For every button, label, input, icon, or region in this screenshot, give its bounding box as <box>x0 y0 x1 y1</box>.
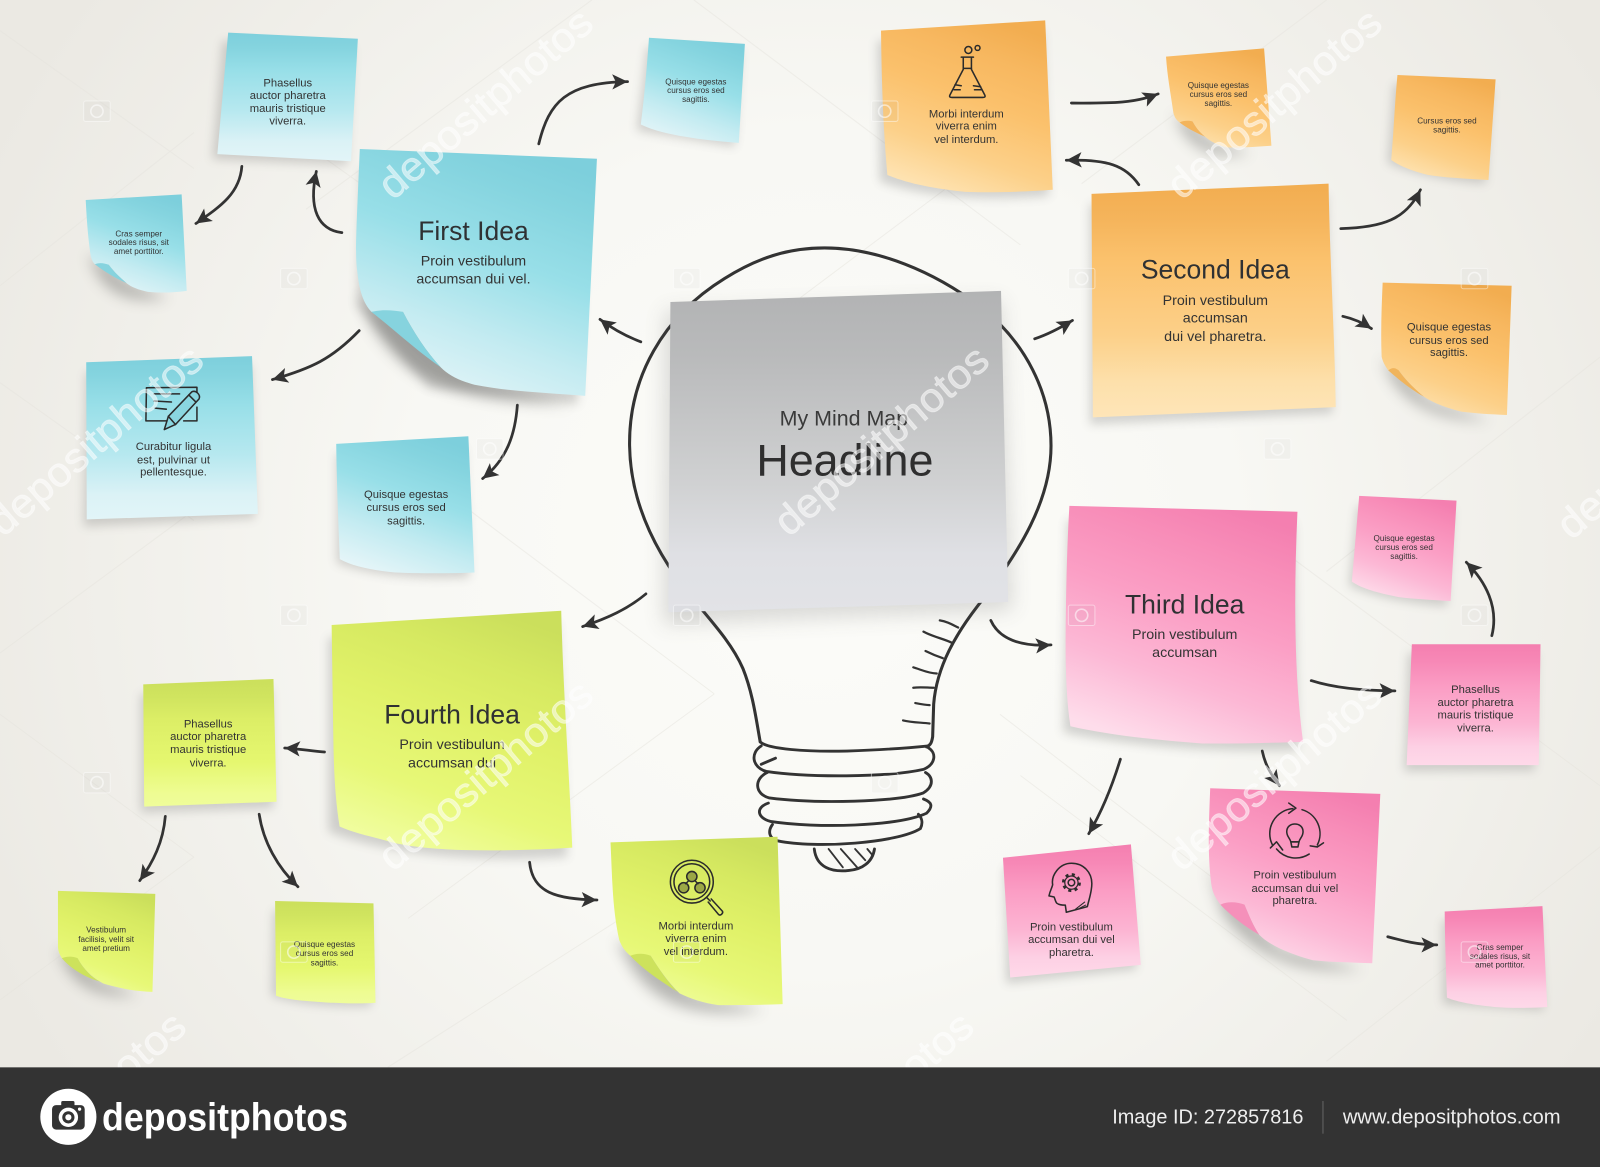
panel: blue note quisque <box>336 436 474 578</box>
second idea heading: Second Idea <box>1141 255 1290 285</box>
third idea text: Proin vestibulum <box>1132 627 1237 643</box>
central subtitle: My Mind Map <box>780 407 908 431</box>
text: Cras semper <box>1477 943 1524 952</box>
depositphotos text watermarks: depositphotos <box>369 0 602 208</box>
arrow: phasellus yellow to quisque yellow <box>259 814 298 887</box>
text: viverra enim <box>936 121 997 133</box>
arrow: phasellus yellow to vestibulum <box>140 816 165 881</box>
text: sodales risus, sit <box>109 238 170 247</box>
text: mauris tristique <box>170 744 246 756</box>
text: amet pretium <box>82 944 130 953</box>
text: cursus eros sed <box>1190 90 1248 99</box>
folded corner <box>1220 902 1259 935</box>
text: Phasellus <box>1451 684 1500 696</box>
depositphotos text watermarks: depositphotos <box>1158 670 1390 879</box>
sheet <box>1391 75 1496 180</box>
folded corner <box>630 954 678 992</box>
sheet <box>336 436 474 573</box>
fourth idea sheet <box>332 611 572 850</box>
arrow: third idea to bulb icon note <box>1262 751 1280 786</box>
sheet <box>1352 496 1457 601</box>
text: cursus eros sed <box>296 949 354 958</box>
arrow: morbi to quisque orange <box>1071 94 1158 103</box>
text: cursus eros sed <box>1375 543 1433 552</box>
third idea sheet <box>1066 506 1303 744</box>
text: sodales risus, sit <box>1470 952 1531 961</box>
text: sagittis. <box>1433 126 1461 135</box>
text: amet porttitor. <box>1475 960 1525 969</box>
panel: pink note cras <box>1443 906 1547 1010</box>
sheet <box>1381 283 1512 415</box>
sheet <box>641 38 745 143</box>
panel: fourth idea main note <box>329 611 572 859</box>
text: viverra enim <box>665 933 726 945</box>
depositphotos text watermarks: depositphotos <box>1158 0 1390 208</box>
text: cursus eros sed <box>1409 335 1489 347</box>
footer logo wordmark: depositphotos <box>102 1097 348 1140</box>
folded corner <box>1180 121 1205 137</box>
text: Morbi interdum <box>929 108 1004 120</box>
text: sagittis. <box>1390 552 1418 561</box>
text: mauris tristique <box>250 103 326 115</box>
panel: pink note with head icon <box>1003 844 1141 984</box>
first idea sheet <box>356 149 597 396</box>
text: Vestibulum <box>86 926 126 935</box>
central note sheet <box>668 291 1008 612</box>
text: pharetra. <box>1272 895 1317 907</box>
sheet <box>86 194 187 293</box>
sheet <box>611 837 783 1005</box>
text: vel interdum. <box>664 946 728 958</box>
depositphotos text watermarks: depositphotos <box>369 670 602 879</box>
footer url: www.depositphotos.com <box>1342 1106 1561 1128</box>
text: Curabitur ligula <box>136 441 212 453</box>
text: Cursus eros sed <box>1417 116 1477 125</box>
panel: blue small curled note <box>86 194 187 300</box>
lightbulb outline <box>630 248 1051 871</box>
panel: yellow curled note vestibulum <box>57 891 155 996</box>
text: Morbi interdum <box>659 921 733 933</box>
text: viverra. <box>190 757 227 769</box>
text: auctor pharetra <box>170 731 247 743</box>
fourth idea text: accumsan dui <box>408 755 496 771</box>
panel: orange small curled note <box>1166 48 1271 155</box>
icon: head with gear <box>1049 863 1092 912</box>
depositphotos camera watermarks <box>84 101 1488 962</box>
second idea text: Proin vestibulum <box>1163 293 1268 309</box>
text: sagittis. <box>387 515 425 527</box>
arrow: phasellus pink to quisque pink <box>1466 562 1494 636</box>
arrow: first idea to phasellus <box>314 171 342 233</box>
folded corner <box>62 957 100 982</box>
panel: pink note quisque top <box>1349 496 1457 606</box>
text: Proin vestibulum <box>1030 922 1113 934</box>
panel: yellow note quisque <box>271 901 376 1007</box>
sheet <box>58 891 155 992</box>
arrow: second idea to cursus <box>1341 190 1420 229</box>
text: Proin vestibulum <box>1253 870 1336 882</box>
footer divider <box>1322 1101 1323 1134</box>
arrow: fourth idea to phasellus yellow <box>285 748 324 752</box>
panel: orange note morbi <box>878 20 1053 198</box>
panel: third idea main note <box>1063 506 1303 751</box>
arrow: center to second idea <box>1035 320 1072 339</box>
arrow: phasellus to cras <box>196 166 242 223</box>
text: sagittis. <box>1430 347 1468 359</box>
footer logo icon <box>40 1089 96 1145</box>
text: pellentesque. <box>140 467 207 479</box>
text: Cras semper <box>115 230 162 239</box>
arrow: third idea to phasellus pink <box>1311 681 1395 691</box>
text: auctor pharetra <box>1437 697 1514 709</box>
first idea text: Proin vestibulum <box>421 253 526 269</box>
icon: magnifier with molecule <box>670 860 723 915</box>
panel: second idea main note <box>1090 184 1336 424</box>
arrow: center to third idea <box>991 620 1051 645</box>
panel: yellow note phasellus <box>141 679 277 812</box>
sheet <box>275 901 376 1003</box>
footer bar <box>0 1067 1600 1167</box>
text: auctor pharetra <box>250 90 327 102</box>
third idea text: accumsan <box>1152 645 1217 661</box>
panel: central headline note <box>663 291 1012 624</box>
arrow: first idea to quisque <box>483 405 517 479</box>
panel: yellow curled note with magnifier icon <box>611 837 783 1013</box>
sheet <box>1166 48 1271 148</box>
text: viverra. <box>269 115 306 127</box>
text: Quisque egestas <box>364 489 449 501</box>
text: cursus eros sed <box>667 86 725 95</box>
panel: first idea main note <box>356 149 597 404</box>
text: facilisis, velit sit <box>78 935 135 944</box>
text: Phasellus <box>263 78 312 90</box>
sheet <box>143 679 277 807</box>
panel: blue note curabitur <box>84 356 258 527</box>
icon: paper and pencil <box>146 387 199 430</box>
first idea folded corner <box>371 310 441 367</box>
bulb screw threads <box>754 742 934 871</box>
folded corner <box>95 263 127 283</box>
first idea heading: First Idea <box>418 216 529 246</box>
sheet <box>1209 788 1380 963</box>
folded corner <box>1388 368 1424 397</box>
central headline: Headline <box>756 435 933 486</box>
panel: orange note cursus <box>1388 75 1496 184</box>
bulb highlight hatching <box>903 620 958 723</box>
depositphotos text watermarks: depositphotos <box>765 336 998 545</box>
text: sagittis. <box>311 958 338 967</box>
arrow: second idea to morbi <box>1066 160 1139 185</box>
panel: blue note phasellus <box>212 33 358 165</box>
sheet <box>217 33 358 161</box>
text: sagittis. <box>1205 99 1232 108</box>
arrow: fourth idea to magnifier note <box>530 862 597 900</box>
second idea text: accumsan <box>1183 310 1248 326</box>
text: est, pulvinar ut <box>137 454 211 466</box>
arrow: first idea to curabitur <box>272 331 359 380</box>
panel: blue note top right <box>637 38 745 147</box>
text: Quisque egestas <box>1373 534 1435 543</box>
text: cursus eros sed <box>367 502 446 514</box>
panel: orange curled note quisque <box>1381 283 1512 420</box>
arrow: center to first idea <box>600 319 641 342</box>
image id: Image ID: 272857816 <box>1112 1106 1303 1128</box>
arrow: third idea to head icon note <box>1089 759 1120 834</box>
text: viverra. <box>1457 723 1494 735</box>
first idea text: accumsan dui vel. <box>416 272 531 288</box>
text: Quisque egestas <box>294 940 355 949</box>
arrow: first idea to blue top right <box>539 82 628 144</box>
second idea text: dui vel pharetra. <box>1164 329 1266 345</box>
text: mauris tristique <box>1437 709 1514 721</box>
text: Phasellus <box>184 719 233 731</box>
sheet <box>1445 906 1547 1008</box>
text: Quisque egestas <box>665 78 727 87</box>
text: sagittis. <box>682 95 710 104</box>
panel: pink note phasellus <box>1404 644 1541 771</box>
sheet <box>1003 844 1141 978</box>
second idea sheet <box>1092 184 1336 417</box>
text: Quisque egestas <box>1407 322 1491 334</box>
arrow: bulb icon note to cras pink <box>1388 937 1437 945</box>
fourth idea heading: Fourth Idea <box>384 699 520 729</box>
sheet <box>1407 644 1541 765</box>
text: amet porttitor. <box>114 247 164 256</box>
sheet <box>881 20 1053 192</box>
text: vel interdum. <box>934 134 998 146</box>
arrow: second idea to quisque curled <box>1343 316 1371 329</box>
text: Quisque egestas <box>1188 81 1249 90</box>
fourth idea text: Proin vestibulum <box>399 737 505 753</box>
text: accumsan dui vel <box>1028 934 1115 946</box>
text: accumsan dui vel <box>1252 883 1338 895</box>
panel: pink curled note with bulb icon <box>1208 788 1380 970</box>
text: pharetra. <box>1049 947 1094 959</box>
arrow: center to fourth idea <box>583 594 646 627</box>
third idea heading: Third Idea <box>1125 589 1245 619</box>
sheet <box>86 356 258 519</box>
icon: cycle with lightbulb <box>1270 803 1323 858</box>
icon: flask <box>950 46 985 97</box>
